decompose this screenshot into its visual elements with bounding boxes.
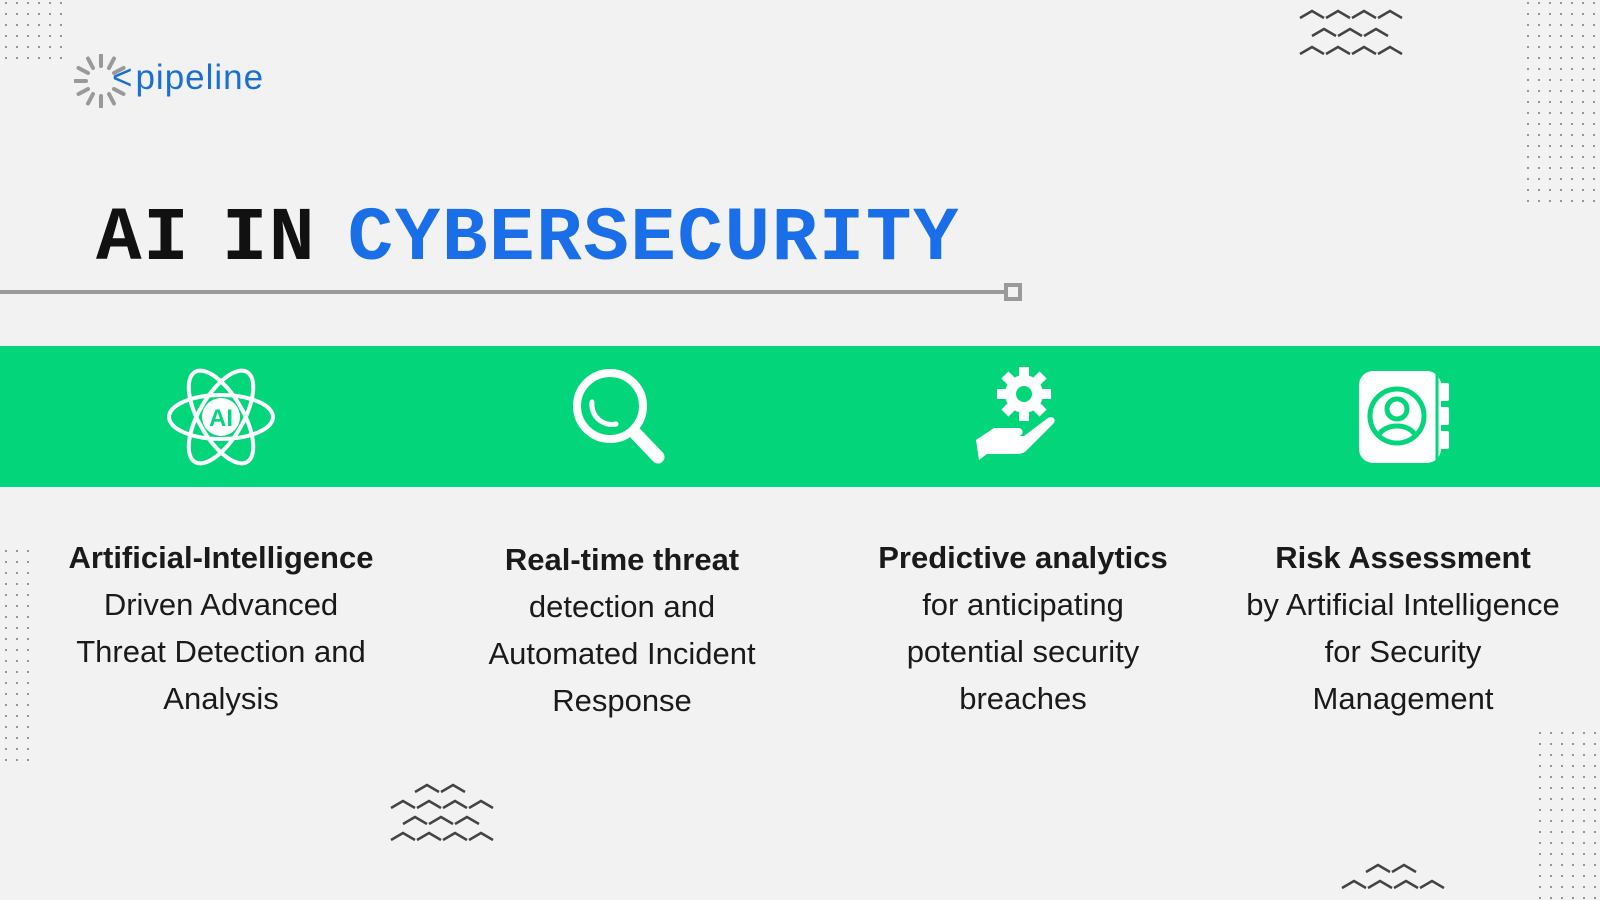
dot pattern bottom-right xyxy=(1539,732,1596,899)
column 1 text: Threat Detection and xyxy=(76,634,366,669)
icon: hand with gear xyxy=(976,367,1055,460)
zigzag top-right xyxy=(1299,10,1403,56)
icon: AI atom xyxy=(167,368,275,466)
column 3 text: Predictive analytics xyxy=(878,540,1168,575)
column 3 text xyxy=(878,540,1168,716)
column 2 text: Response xyxy=(552,683,692,718)
column 1 text: Driven Advanced xyxy=(104,587,338,622)
title underline xyxy=(0,290,1005,294)
title: AI IN CYBERSECURITY xyxy=(96,196,960,282)
icon: logo burst xyxy=(74,54,126,108)
icon: magnifier xyxy=(573,369,664,464)
column 3 text: breaches xyxy=(959,681,1087,716)
zigzag bottom-right xyxy=(1341,864,1445,890)
column 1 text: Artificial-Intelligence xyxy=(69,540,373,575)
column 4 text: for Security xyxy=(1325,634,1481,669)
dot pattern top-left xyxy=(5,2,62,59)
underline end square xyxy=(1004,283,1022,301)
icon: contact book xyxy=(1359,371,1449,463)
column 1 text xyxy=(69,540,373,716)
column 2 text: detection and xyxy=(529,589,715,624)
column 4 text: Risk Assessment xyxy=(1275,540,1531,575)
green band xyxy=(0,346,1600,487)
icon: AI atom: AI xyxy=(209,405,233,432)
zigzag bottom-middle xyxy=(390,784,494,842)
column 2 text xyxy=(488,542,756,718)
column 3 text: for anticipating xyxy=(922,587,1124,622)
column 3 text: potential security xyxy=(907,634,1139,669)
column 4 text: Management xyxy=(1313,681,1493,716)
column 2 text: Real-time threat xyxy=(505,542,739,577)
dot pattern left xyxy=(5,550,29,761)
column 1 text: Analysis xyxy=(163,681,279,716)
column 4 text: by Artificial Intelligence xyxy=(1246,587,1560,622)
logo xyxy=(74,54,264,108)
dot pattern top-right xyxy=(1527,2,1595,202)
column 2 text: Automated Incident xyxy=(488,636,756,671)
column 4 text xyxy=(1246,540,1560,716)
logo text: <pipeline xyxy=(112,58,264,97)
